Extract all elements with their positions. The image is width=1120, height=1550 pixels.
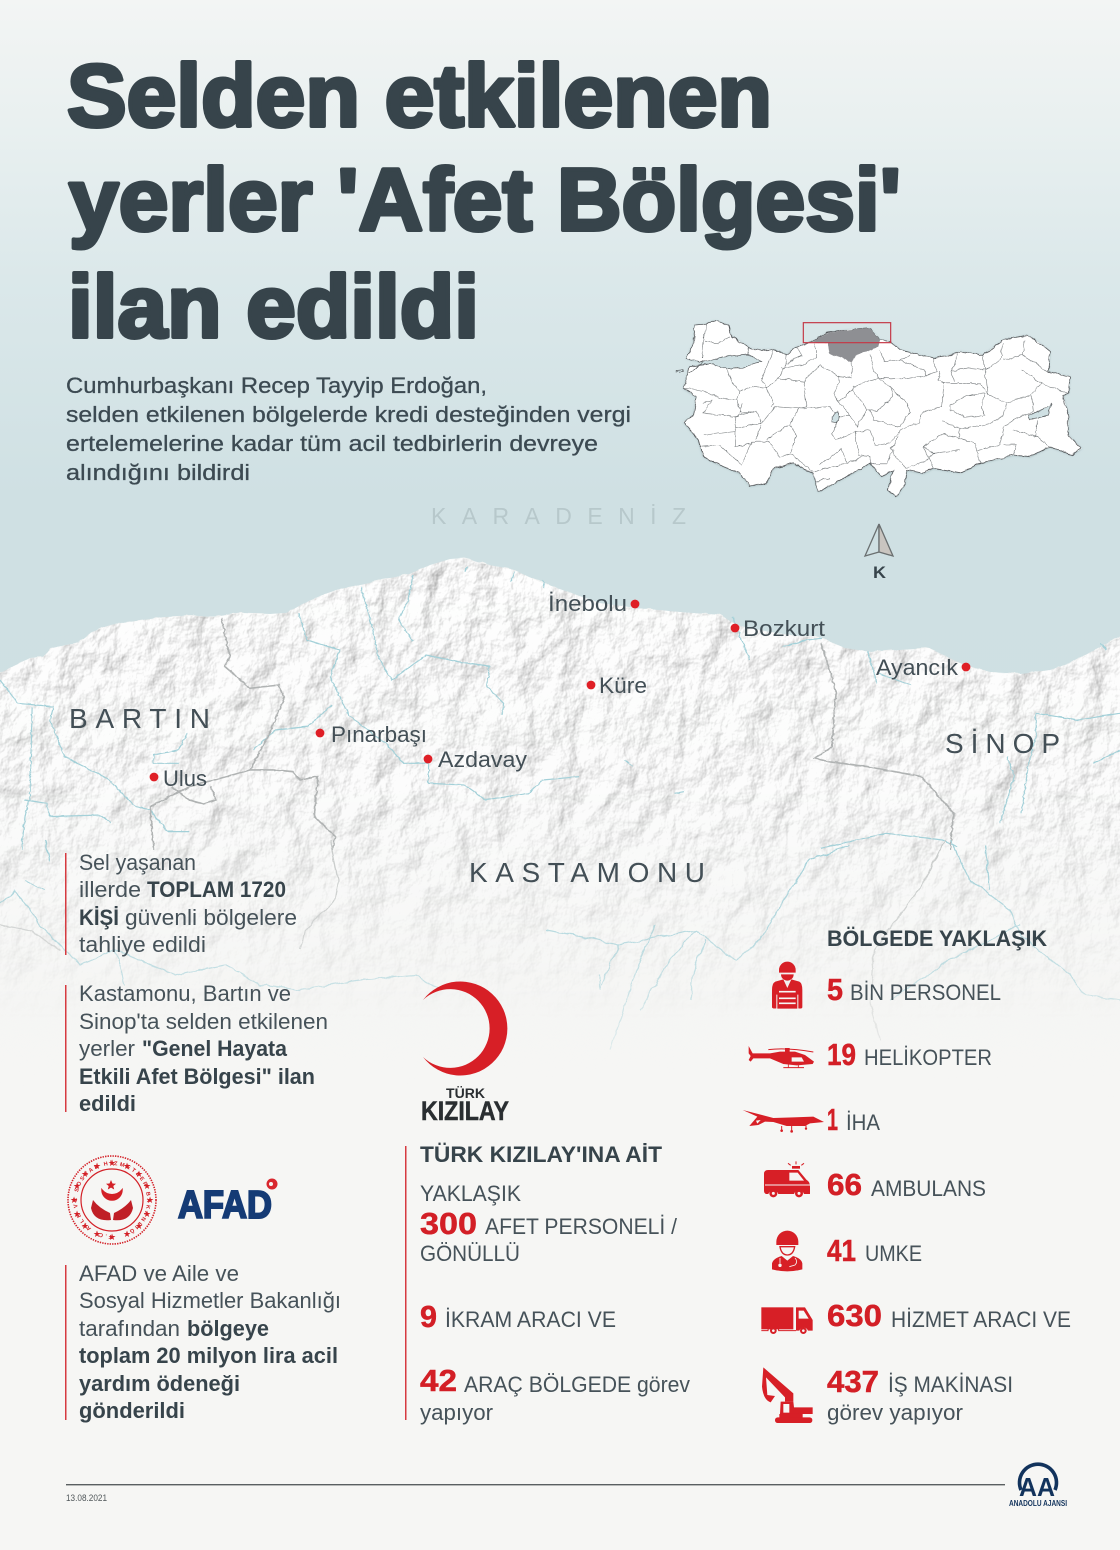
text block: evacuation: KİŞİ: [79, 905, 119, 930]
title: yerler 'Afet Bölgesi': [69, 150, 901, 249]
city: Ayancık: Ayancık: [876, 655, 959, 680]
text block: AFAD funding: gönderildi: [79, 1398, 185, 1423]
icon: Türk Kızılay logo: [421, 982, 509, 1126]
row: helicopters: 19: [827, 1037, 856, 1072]
panel: regional resources: [743, 926, 1071, 1425]
intro text: Cumhurbaşkanı Recep Tayyip Erdoğan,: [66, 373, 487, 398]
icon: ministry seal: ★: [135, 1221, 143, 1231]
city: İnebolu: İnebolu: [548, 591, 627, 616]
row: drone: 1: [827, 1102, 838, 1137]
text block: disaster area declaration: Sinop'ta selden etkilenen: [79, 1009, 328, 1034]
lakes: [677, 369, 1052, 423]
panel: Türk Kızılay resources: 42: [420, 1363, 457, 1398]
region labels: SİNOP: [945, 728, 1060, 759]
row: personnel: 5: [827, 972, 843, 1007]
row: machinery: İŞ MAKİNASI: [888, 1372, 1013, 1397]
panel: Türk Kızılay resources: AFET PERSONELİ /: [485, 1214, 678, 1239]
text block: disaster area declaration: Kastamonu, Bartın ve: [79, 981, 291, 1006]
icon: ministry seal: ★: [73, 1181, 81, 1191]
icon: ministry seal: ★: [93, 1229, 101, 1239]
icon: ministry seal: ★: [135, 1169, 143, 1179]
region labels: [69, 703, 1060, 888]
row: ambulances: 66: [827, 1167, 862, 1202]
text block: evacuation: tahliye edildi: [79, 932, 206, 957]
icon: Anadolu Ajansı logo: [1009, 1464, 1067, 1508]
country outline: [683, 321, 1082, 497]
panel: Türk Kızılay resources: İKRAM ARACI VE: [445, 1307, 616, 1332]
region labels: BARTIN: [69, 703, 210, 734]
Kastamonu Bartin Sinop highlight: [813, 328, 880, 362]
text block: disaster area declaration: Etkili Afet Bölgesi" ilan: [79, 1064, 315, 1089]
row: drone: [743, 1102, 880, 1137]
row: personnel: [772, 962, 1001, 1009]
text block: evacuation: illerde: [79, 877, 141, 902]
panel: Türk Kızılay resources: TÜRK KIZILAY'INA AİT: [420, 1142, 663, 1167]
row: UMKE medics: 41: [827, 1233, 856, 1268]
region labels: KASTAMONU: [469, 857, 705, 888]
row: machinery: [762, 1364, 1013, 1425]
Marmara sea: [689, 354, 762, 373]
text block: disaster area declaration: "Genel Hayata: [142, 1036, 288, 1061]
map: northern Turkey flood region: [0, 550, 1120, 1550]
title: Selden etkilenen: [67, 46, 772, 145]
icon: ministry seal: T.C. AİLE VE SOSYAL HİZMETLER BAKANLIĞI: [73, 1160, 150, 1239]
icon: ministry seal: ★: [73, 1209, 81, 1219]
panel: Türk Kızılay resources: [405, 1142, 690, 1425]
text block: AFAD funding: tarafından: [79, 1316, 180, 1341]
row: service vehicles: [761, 1298, 1071, 1334]
icon: ministry seal: ★: [108, 1232, 116, 1242]
row: helicopters: [749, 1037, 992, 1072]
icon: ministry seal: ★: [123, 1229, 131, 1239]
locator map: Turkey: [677, 321, 1082, 497]
text block: AFAD funding: Sosyal Hizmetler Bakanlığı: [79, 1288, 341, 1313]
text block: disaster area declaration: yerler: [79, 1036, 135, 1061]
icon: ministry seal: ★: [93, 1161, 101, 1171]
land mass: [0, 558, 1120, 1550]
panel: Türk Kızılay resources: GÖNÜLLÜ: [420, 1241, 520, 1266]
rivers and province borders: [0, 567, 1120, 850]
text block: AFAD funding: [65, 1261, 341, 1423]
text block: evacuation: TOPLAM 1720: [147, 877, 286, 902]
icon: Anadolu Ajansı logo: AA: [1019, 1472, 1055, 1502]
panel: Türk Kızılay resources: yapıyor: [420, 1400, 493, 1425]
sea label: KARADENİZ: [431, 503, 686, 529]
intro text: ertelemelerine kadar tüm acil tedbirlerin devreye: [66, 431, 598, 456]
icon: ministry seal: ★: [146, 1195, 154, 1205]
panel: Türk Kızılay resources: YAKLAŞIK: [420, 1181, 521, 1206]
text block: evacuation: güvenli bölgelere: [125, 905, 297, 930]
southern rivers and borders, fading: [0, 840, 1120, 1050]
panel: Türk Kızılay resources: 300: [420, 1206, 477, 1241]
text block: evacuation: Sel yaşanan: [79, 850, 196, 875]
text block: disaster area declaration: [65, 981, 328, 1116]
row: ambulances: [764, 1161, 986, 1202]
heading: BÖLGEDE YAKLAŞIK: [827, 926, 1047, 951]
city markers: [150, 591, 970, 791]
text block: AFAD funding: yardım ödeneği: [79, 1371, 240, 1396]
city: Ulus: Ulus: [163, 766, 207, 791]
text block: AFAD funding: toplam 20 milyon lira acil: [79, 1343, 338, 1368]
intro text: [66, 373, 631, 485]
icon: ministry seal: ★: [123, 1161, 131, 1171]
icon: Türk Kızılay logo: KIZILAY: [421, 1096, 509, 1126]
icon: ministry seal: ★: [70, 1195, 78, 1205]
footer: rule and date: 13.08.2021: [66, 1493, 107, 1503]
city: Azdavay: Azdavay: [438, 747, 527, 772]
row: drone: İHA: [846, 1110, 880, 1135]
row: service vehicles: 630: [827, 1298, 882, 1333]
city: Bozkurt: Bozkurt: [743, 616, 825, 641]
row: service vehicles: HİZMET ARACI VE: [891, 1307, 1071, 1332]
text block: disaster area declaration: edildi: [79, 1091, 136, 1116]
icon: north arrow: K: [873, 563, 887, 582]
row: personnel: BİN PERSONEL: [850, 980, 1001, 1005]
icon: Anadolu Ajansı logo: ANADOLU AJANSI: [1009, 1499, 1067, 1508]
icon: ministry seal: ★: [81, 1221, 89, 1231]
row: machinery: görev yapıyor: [827, 1400, 963, 1425]
icon: Türk Kızılay logo: TÜRK: [446, 1086, 485, 1101]
icon: ministry seal: ★: [81, 1169, 89, 1179]
panel: Türk Kızılay resources: ARAÇ BÖLGEDE görev: [464, 1372, 690, 1397]
text block: AFAD funding: AFAD ve Aile ve: [79, 1261, 239, 1286]
icon: AFAD logo: AFAD: [178, 1184, 272, 1227]
row: UMKE medics: [772, 1231, 922, 1271]
row: ambulances: AMBULANS: [871, 1176, 986, 1201]
city: Pınarbaşı: Pınarbaşı: [331, 722, 427, 747]
icon: ministry seal: ★: [143, 1209, 151, 1219]
text block: AFAD funding: bölgeye: [187, 1316, 269, 1341]
row: machinery: 437: [827, 1364, 879, 1399]
intro text: selden etkilenen bölgelerde kredi desteğinden vergi: [66, 402, 631, 427]
row: helicopters: HELİKOPTER: [864, 1045, 992, 1070]
text block: evacuation: [65, 850, 297, 957]
icon: ministry seal: ★: [108, 1158, 116, 1168]
title: ilan edildi: [68, 257, 479, 356]
panel: Türk Kızılay resources: 9: [420, 1299, 437, 1334]
row: UMKE medics: UMKE: [865, 1241, 922, 1266]
icon: north arrow: [865, 524, 893, 582]
intro text: alındığını bildirdi: [66, 460, 250, 485]
title: [67, 46, 901, 356]
province borders: [683, 323, 1068, 482]
red selection frame: [803, 323, 891, 343]
terrain relief: [0, 558, 1120, 990]
city: Küre: Küre: [599, 673, 647, 698]
icon: ministry seal: ★: [143, 1181, 151, 1191]
